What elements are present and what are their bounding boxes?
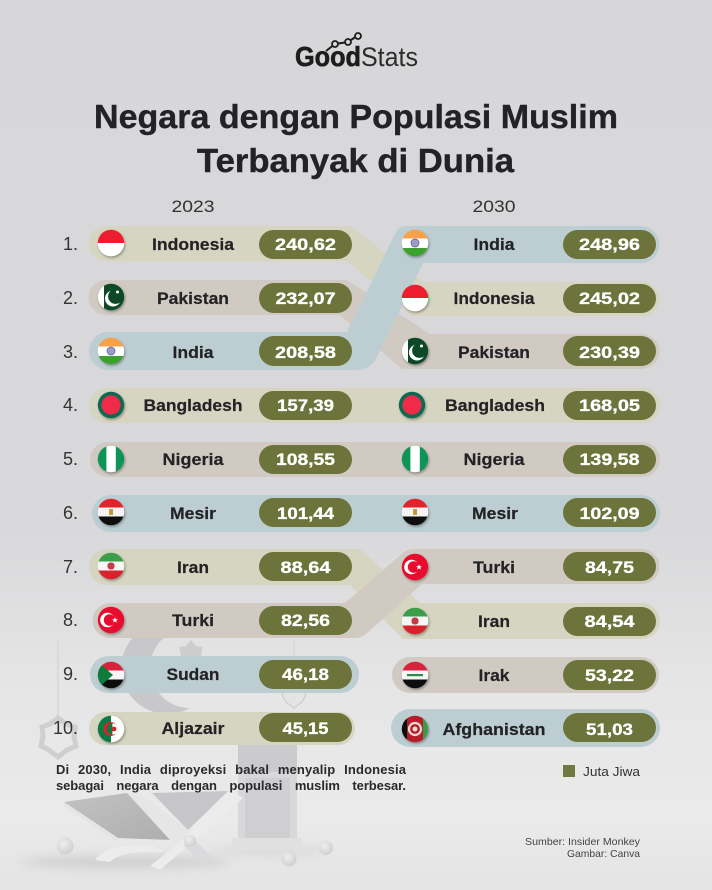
rank numbers: 2. [63,288,78,308]
row: Mesir 2023: Mesir [170,504,216,523]
rank numbers: 3. [63,342,78,362]
row: Nigeria 2023 [97,445,352,474]
row: Irak 2030: Irak [478,666,510,685]
row: Mesir 2023 [97,498,352,527]
source credits: Gambar: Canva [567,848,640,860]
title [94,98,618,179]
row: India 2023 [97,336,352,366]
rank numbers: 9. [63,664,78,684]
row: Turki 2030: 84,75 [585,558,634,577]
row: Afghanistan 2030: 51,03 [586,720,633,739]
row: Pakistan 2023: Pakistan [157,289,229,308]
rank numbers: 8. [63,610,78,630]
row: Nigeria 2023: Nigeria [162,450,224,469]
row: Iran 2030: 84,54 [584,612,635,631]
legend: Juta Jiwa [563,764,641,779]
title: Negara dengan Populasi Muslim [94,98,618,135]
row: Iran 2023: Iran [177,558,209,577]
row: India 2030: 248,96 [579,235,640,254]
row: Aljazair 2023: 45,15 [282,719,328,738]
row: Bangladesh 2030 [398,391,656,420]
row: Bangladesh 2023 [97,391,352,420]
row: Mesir 2023: 101,44 [277,504,335,523]
row: Nigeria 2030 [401,445,656,474]
row: Afghanistan 2030 [401,713,656,743]
row: Bangladesh 2030: 168,05 [579,396,640,415]
row: Afghanistan 2030: Afghanistan [442,720,546,739]
row: India 2030 [401,229,656,259]
row: India 2023: India [172,343,214,362]
row: Pakistan 2023 [97,283,352,313]
row: Indonesia 2023: Indonesia [152,235,235,254]
row: Indonesia 2030: Indonesia [454,289,535,308]
row: Turki 2023: Turki [172,611,214,630]
rank numbers: 6. [63,503,78,523]
row: Bangladesh 2023: Bangladesh [144,396,242,415]
row: Aljazair 2023: Aljazair [162,719,225,738]
title: Terbanyak di Dunia [197,142,515,179]
rank numbers: 7. [63,557,78,577]
rank numbers: 4. [63,395,78,415]
row: Aljazair 2023 [97,713,352,743]
row: Nigeria 2030: 139,58 [580,450,640,469]
row: Pakistan 2030 [401,336,656,366]
row: Pakistan 2030: 230,39 [579,343,640,362]
column 2030 [398,229,656,743]
rank numbers: 10. [53,718,78,738]
row: Mesir 2030: 102,09 [580,504,640,523]
row: Sudan 2023: 46,18 [282,665,329,684]
row: Indonesia 2023: 240,62 [275,235,336,254]
row: Indonesia 2023 [97,229,352,259]
row: Nigeria 2030: Nigeria [464,450,525,469]
row: Mesir 2030: Mesir [472,504,518,523]
row: Turki 2030 [401,552,656,581]
logo: GoodStats: Good [295,41,361,72]
row: India 2030: India [474,235,515,254]
row: Irak 2030: 53,22 [585,666,634,685]
row: Iran 2030: Iran [478,612,510,631]
row: Mesir 2030 [401,498,656,527]
row: India 2023: 208,58 [275,343,336,362]
row: Bangladesh 2023: 157,39 [277,396,334,415]
row: Iran 2030 [401,607,656,636]
row: Nigeria 2023: 108,55 [276,450,335,469]
column 2023 [97,229,352,743]
year heading 2030: 2030 [472,197,516,216]
logo: GoodStats: Stats [361,42,418,72]
decorative photo: crescent, stars, lantern, Quran stand [20,622,333,870]
row: Iran 2023: 88,64 [280,558,331,577]
rank numbers: 5. [63,449,78,469]
ranking ribbons connecting 2023 and 2030 [88,226,660,747]
source credits [525,836,641,860]
rank numbers [53,234,78,738]
row: Sudan 2023 [97,660,352,690]
rank numbers: 1. [63,234,78,254]
note text: sebagai negara dengan populasi muslim terbesar. [56,778,406,793]
row: Indonesia 2030: 245,02 [579,289,640,308]
row: Turki 2023: 82,56 [281,611,330,630]
logo: GoodStats [295,33,418,72]
row: Pakistan 2023: 232,07 [276,289,336,308]
row: Turki 2023 [97,606,352,635]
row: Sudan 2023: Sudan [166,665,220,684]
note text: Di 2030, India diproyeksi bakal menyalip Indonesia [56,762,407,777]
row: Iran 2023 [97,552,352,581]
row: Pakistan 2030: Pakistan [458,343,530,362]
row: Bangladesh 2030: Bangladesh [445,396,545,415]
note text [56,762,407,793]
legend: Juta Jiwa: Juta Jiwa [583,764,641,779]
row: Irak 2030 [401,660,656,690]
source credits: Sumber: Insider Monkey [525,836,641,848]
row: Turki 2030: Turki [473,558,515,577]
row: Indonesia 2030 [401,284,656,313]
year heading 2023: 2023 [172,197,214,216]
